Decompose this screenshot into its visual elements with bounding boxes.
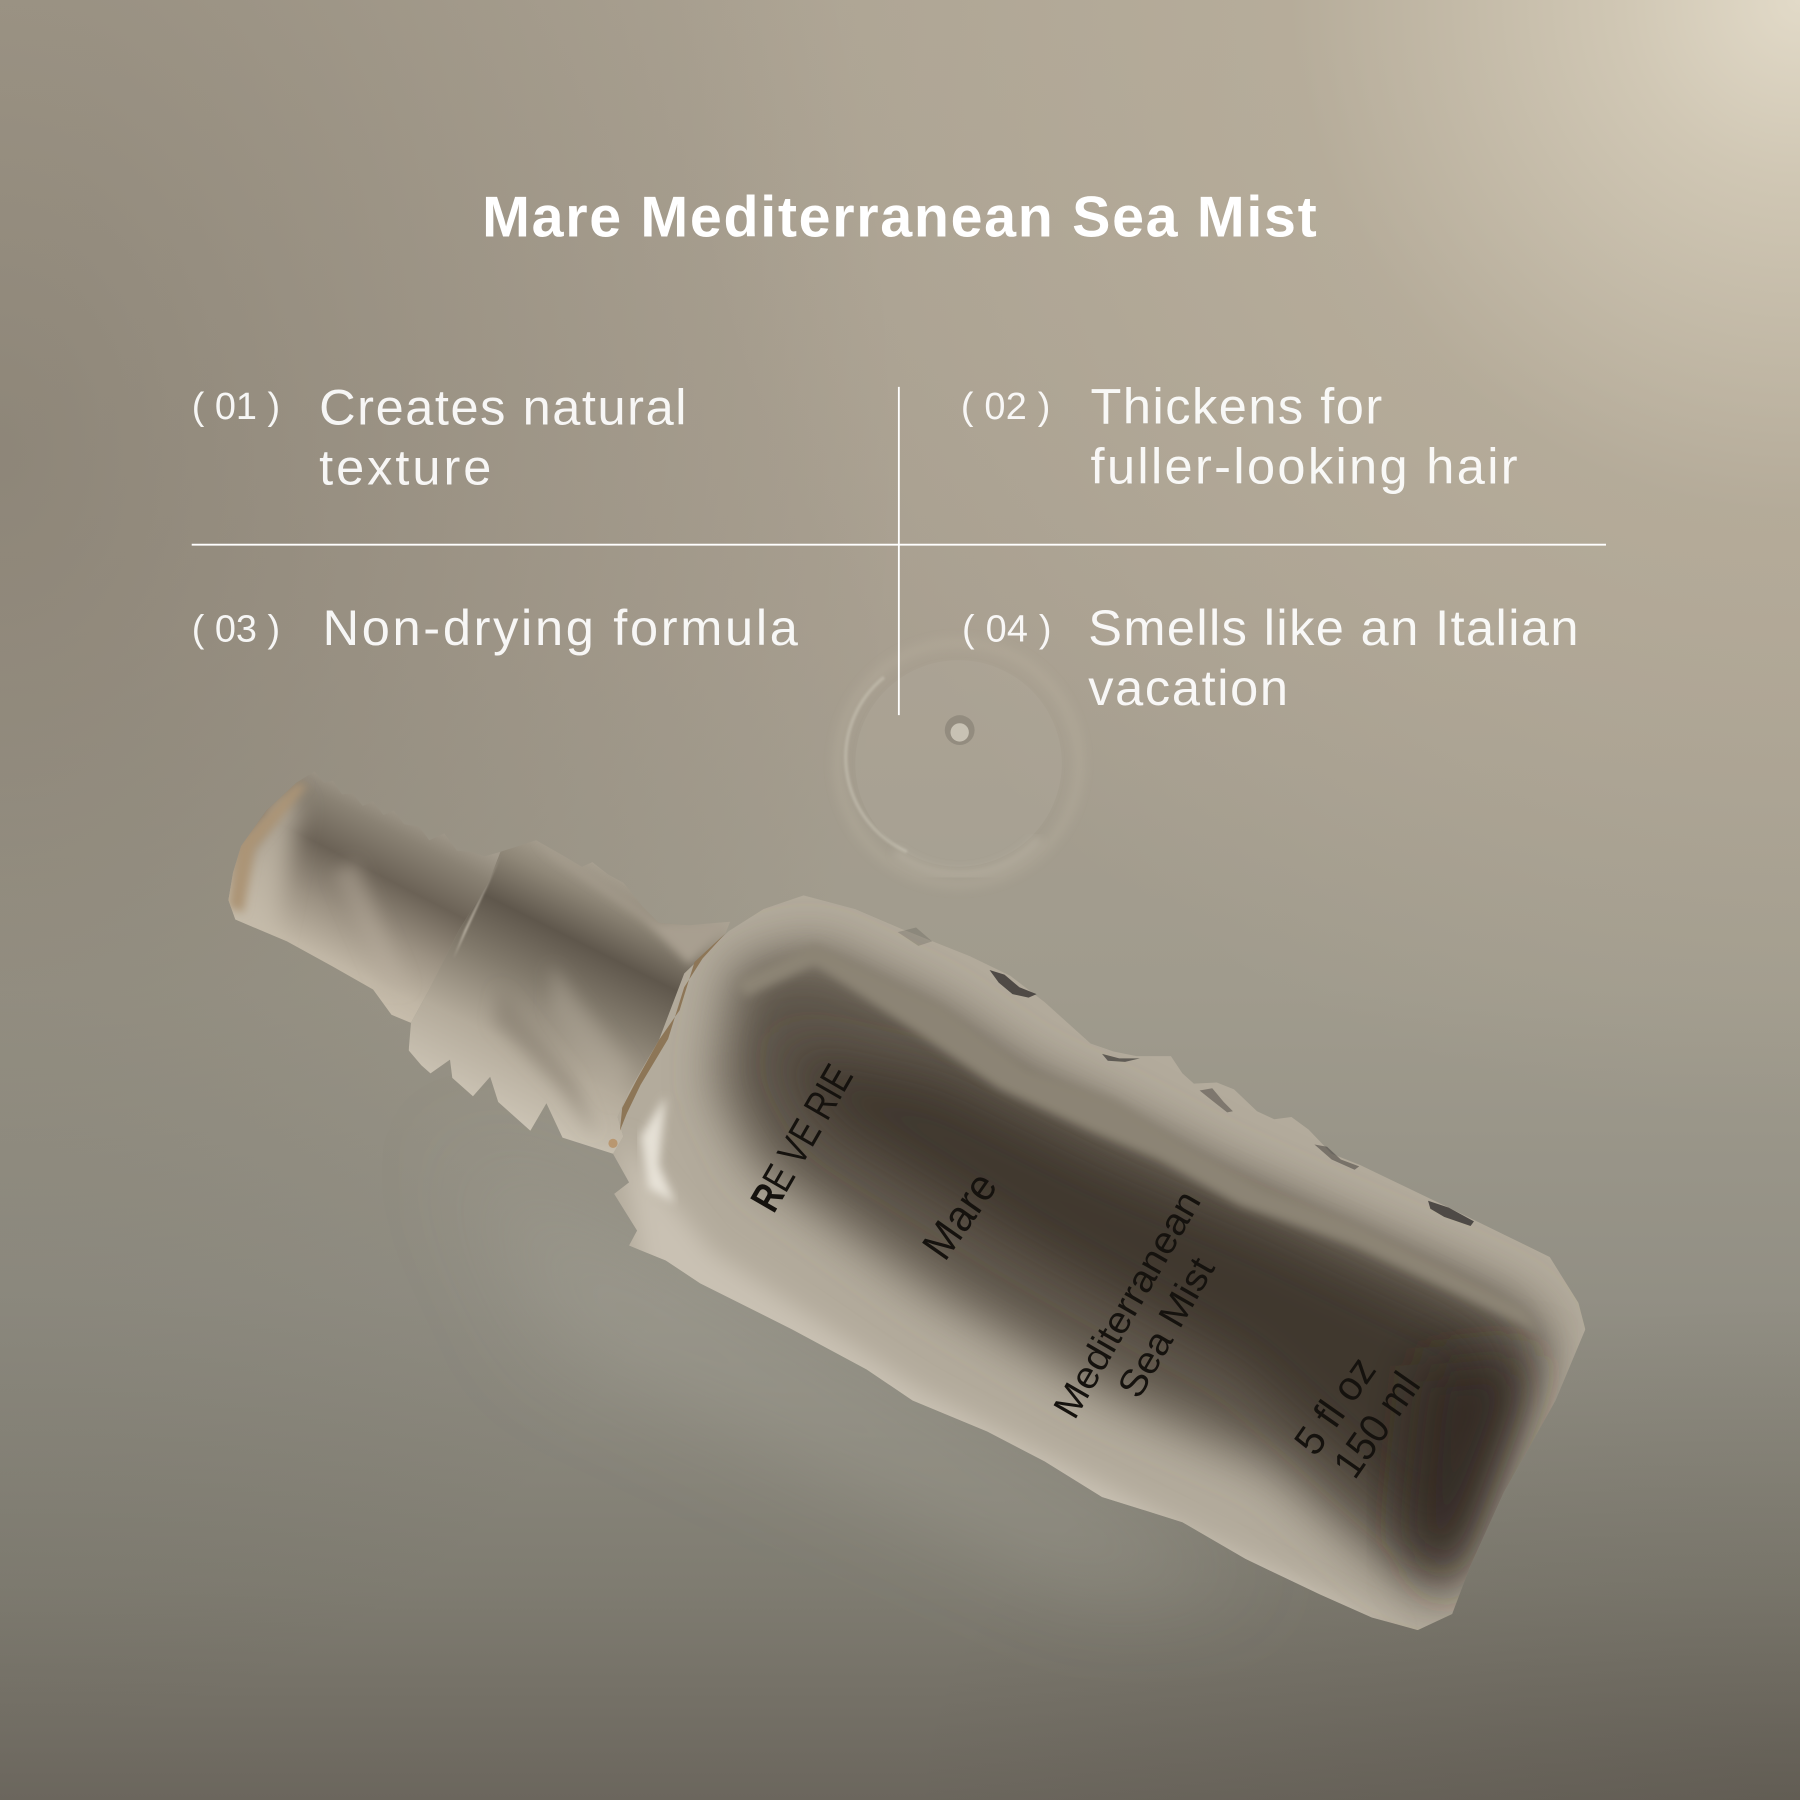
- label: name: Mare: [914, 1164, 1007, 1268]
- benefit 04: vacation: [1088, 659, 1288, 716]
- benefit 02: fuller-looking hair: [1091, 437, 1518, 494]
- reflection glow under bottle: [459, 1148, 1263, 1596]
- cap upper section: [228, 779, 500, 1023]
- bottle: [218, 758, 1607, 1642]
- upper ridge band: [743, 956, 1530, 1328]
- benefit 04: ( 04 ): [962, 609, 1052, 651]
- benefit 02: ( 02 ): [961, 386, 1050, 428]
- map marks on bottle shoulder: [898, 928, 1474, 1226]
- benefit 04: Smells like an Italian: [1088, 599, 1578, 656]
- benefit 01: Creates natural: [319, 379, 686, 436]
- title: Mare Mediterranean Sea Mist: [482, 185, 1317, 249]
- label: product line one: Mediterranean: [1046, 1184, 1210, 1426]
- label: product line two: Sea Mist: [1110, 1250, 1224, 1405]
- benefit 03: Non-drying formula: [323, 599, 799, 656]
- grid dividers: [192, 387, 1606, 715]
- water ripple with droplet: [838, 643, 1079, 884]
- benefit 03: ( 03 ): [192, 609, 280, 651]
- benefit 01: ( 01 ): [192, 386, 280, 428]
- benefit 02: [961, 378, 1518, 494]
- label: size imperial: 5 fl oz: [1285, 1348, 1385, 1463]
- seam between cap and body: [620, 933, 726, 1131]
- bottle label text: [742, 1057, 1429, 1486]
- bottle body: [597, 884, 1607, 1642]
- highlight near shoulder: [641, 1096, 675, 1203]
- label: brand: RE VE RIE: [742, 1057, 862, 1219]
- benefit 01: [192, 379, 686, 495]
- benefit 02: Thickens for: [1091, 378, 1382, 435]
- main illustration canvas: [192, 194, 1606, 1630]
- benefit 04: [962, 599, 1578, 716]
- benefit 01: texture: [319, 438, 491, 495]
- label: size metric: 150 ml: [1324, 1364, 1429, 1486]
- cap lower section: [408, 840, 730, 1154]
